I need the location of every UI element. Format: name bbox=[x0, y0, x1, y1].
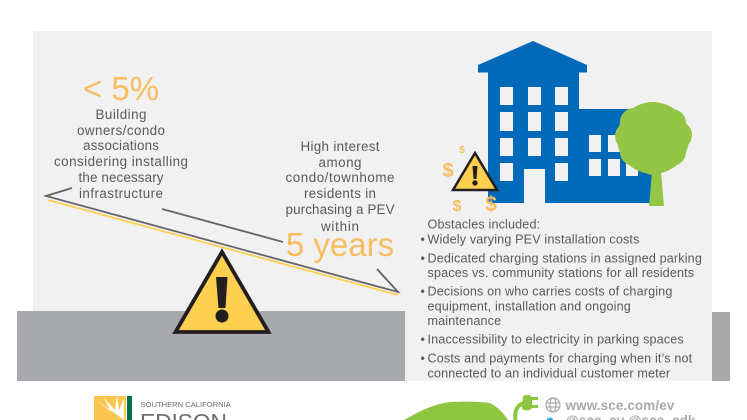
text block: building owners: associations bbox=[83, 138, 159, 153]
obstacle 2 bbox=[420, 252, 702, 280]
text block: obstacles list: Obstacles included: bbox=[428, 218, 540, 232]
panel: light grey background bbox=[33, 31, 712, 381]
icons: dollar signs bbox=[442, 145, 497, 216]
text block: resident interest: residents in bbox=[304, 186, 376, 201]
text block: resident interest: High interest bbox=[300, 139, 380, 154]
icon: apartment building bbox=[478, 41, 654, 203]
icon: tree bbox=[615, 102, 692, 206]
obstacle 4: • bbox=[420, 332, 425, 346]
obstacle 2: spaces vs. community stations for all residents bbox=[428, 266, 694, 280]
text block: obstacles list bbox=[420, 218, 702, 380]
text: website: www.sce.com/ev bbox=[564, 398, 675, 413]
icons: dollar signs: $ bbox=[453, 198, 462, 215]
text block: resident interest bbox=[286, 139, 395, 234]
icons: dollar signs: $ bbox=[459, 145, 465, 156]
obstacle 3: Decisions on who carries costs of charging bbox=[428, 284, 672, 298]
logo: Southern California Edison bbox=[94, 396, 232, 420]
obstacle 1: Widely varying PEV installation costs bbox=[428, 232, 640, 246]
obstacle 2: Dedicated charging stations in assigned parking bbox=[428, 252, 702, 266]
obstacle 5: Costs and payments for charging when it’s not bbox=[428, 352, 693, 366]
text block: building owners: owners/condo bbox=[77, 123, 165, 138]
obstacle 3: equipment, installation and ongoing bbox=[428, 300, 631, 314]
text block: resident interest: among bbox=[318, 155, 362, 170]
obstacle 5: • bbox=[420, 352, 425, 366]
text block: resident interest: within bbox=[320, 219, 359, 234]
text block: building owners: Building bbox=[96, 107, 146, 122]
text block: resident interest: purchasing a PEV bbox=[286, 202, 395, 217]
obstacle 3: maintenance bbox=[428, 314, 501, 328]
building windows bbox=[500, 87, 638, 203]
obstacle 4: Inaccessibility to electricity in parking spaces bbox=[428, 332, 684, 346]
text block: resident interest: condo/townhome bbox=[286, 170, 394, 185]
icon: warning fulcrum bbox=[176, 252, 268, 332]
obstacle 5: connected to an individual customer meter bbox=[428, 366, 670, 380]
icon: twitter bbox=[546, 418, 554, 420]
stat: less than 5 percent: < 5% bbox=[83, 70, 159, 107]
logo: Southern California Edison: SOUTHERN CALIFORNIA bbox=[140, 400, 232, 409]
icons: dollar signs: $ bbox=[485, 193, 497, 216]
obstacle 3 bbox=[420, 284, 672, 328]
stat: 5 years: 5 years bbox=[286, 226, 394, 263]
icons: dollar signs: $ bbox=[442, 160, 454, 182]
ground band: right bbox=[712, 312, 730, 381]
icon: globe bbox=[546, 398, 560, 412]
text block: building owners: infrastructure bbox=[79, 186, 163, 201]
seesaw beam arrow bbox=[46, 188, 398, 295]
text block: building owners: the necessary bbox=[78, 170, 164, 185]
obstacle 5 bbox=[420, 352, 693, 380]
obstacle 2: • bbox=[420, 252, 425, 266]
text block: building owners: considering installing bbox=[54, 154, 188, 169]
text block: building owners bbox=[54, 107, 188, 201]
icon: small warning triangle bbox=[453, 153, 497, 190]
obstacle 3: • bbox=[420, 284, 425, 298]
obstacle 1: • bbox=[420, 232, 425, 246]
ground band: left bbox=[17, 311, 405, 381]
icon: green electric car with plug bbox=[404, 395, 538, 420]
